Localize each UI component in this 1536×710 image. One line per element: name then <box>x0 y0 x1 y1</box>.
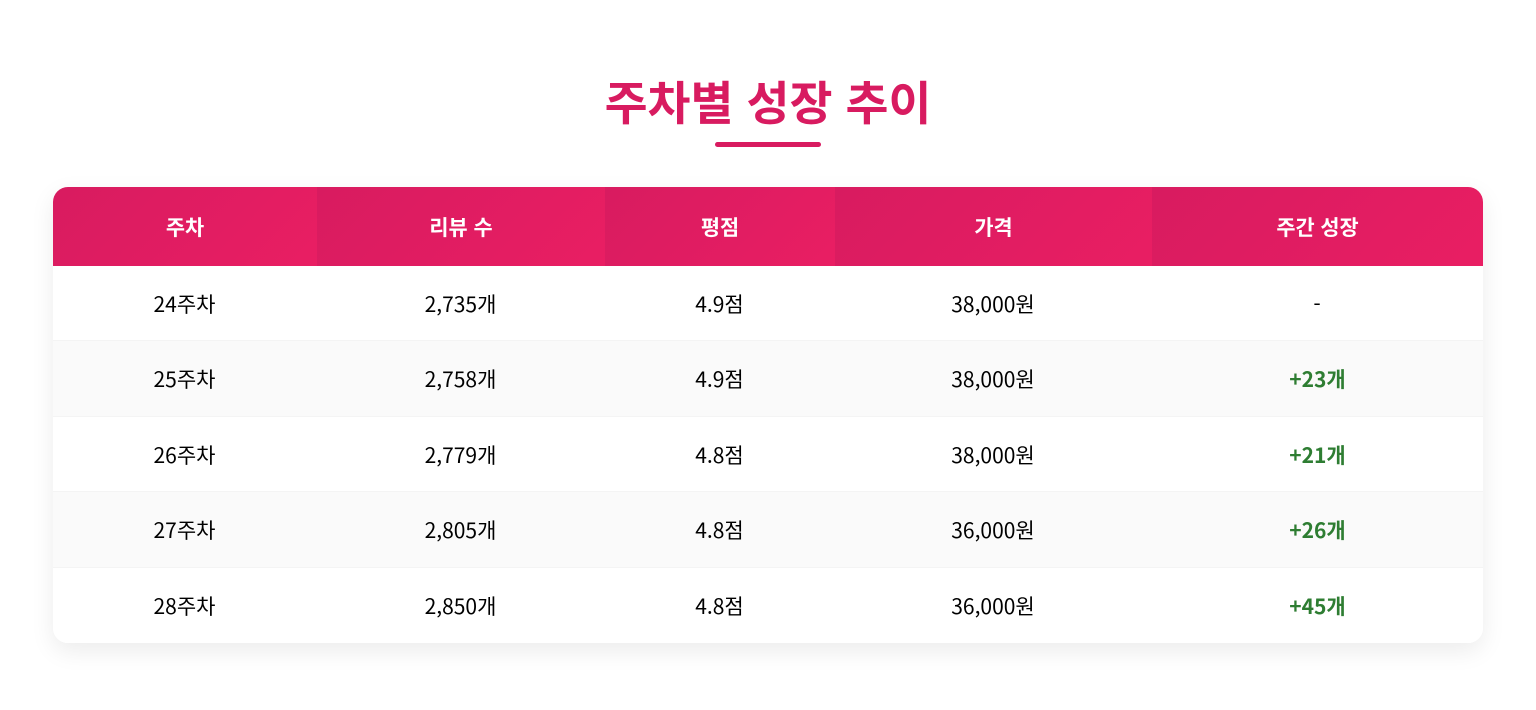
row: week 25: 38,000원 <box>951 364 1035 394</box>
row: week 24 <box>53 288 1483 341</box>
row: week 25 <box>53 364 1483 417</box>
row: week 24: - <box>1313 288 1321 318</box>
table header row: 리뷰 수 <box>429 210 493 240</box>
title underline <box>715 142 821 147</box>
row: week 26: 26주차 <box>154 440 215 470</box>
row: week 26 <box>53 440 1483 492</box>
table header row <box>53 187 1483 266</box>
row: week 25: +23개 <box>1289 364 1346 394</box>
row: week 28: 2,850개 <box>425 591 496 621</box>
row: week 25: 25주차 <box>154 364 215 394</box>
row: week 28: +45개 <box>1289 591 1346 621</box>
row: week 25: 4.9점 <box>695 364 744 394</box>
table header row: 주간 성장 <box>1276 210 1359 240</box>
row: week 28: 28주차 <box>154 591 215 621</box>
row: week 26: 38,000원 <box>951 440 1035 470</box>
row: week 24: 2,735개 <box>425 288 496 318</box>
row: week 28: 36,000원 <box>951 591 1035 621</box>
row: week 27: 36,000원 <box>951 515 1035 545</box>
row: week 28: 4.8점 <box>695 591 744 621</box>
row: week 27: 27주차 <box>154 515 215 545</box>
row: week 24: 38,000원 <box>951 288 1035 318</box>
row: week 27: 2,805개 <box>425 515 496 545</box>
table header row: 가격 <box>974 210 1013 240</box>
row: week 24: 24주차 <box>154 288 215 318</box>
row: week 26: +21개 <box>1289 440 1346 470</box>
table header row: 주차 <box>166 210 204 240</box>
row: week 27: 4.8점 <box>695 515 744 545</box>
row: week 27: +26개 <box>1289 515 1346 545</box>
panel: weekly growth table <box>53 187 1483 643</box>
title: 주차별 성장 추이 <box>605 67 931 134</box>
row: week 28 <box>154 591 1346 621</box>
row: week 26: 2,779개 <box>425 440 496 470</box>
row: week 25: 2,758개 <box>425 364 496 394</box>
row: week 26: 4.8점 <box>695 440 744 470</box>
row: week 24: 4.9점 <box>695 288 744 318</box>
table header row: 평점 <box>701 210 739 240</box>
row: week 27 <box>53 515 1483 568</box>
table card shadow <box>53 187 1483 643</box>
